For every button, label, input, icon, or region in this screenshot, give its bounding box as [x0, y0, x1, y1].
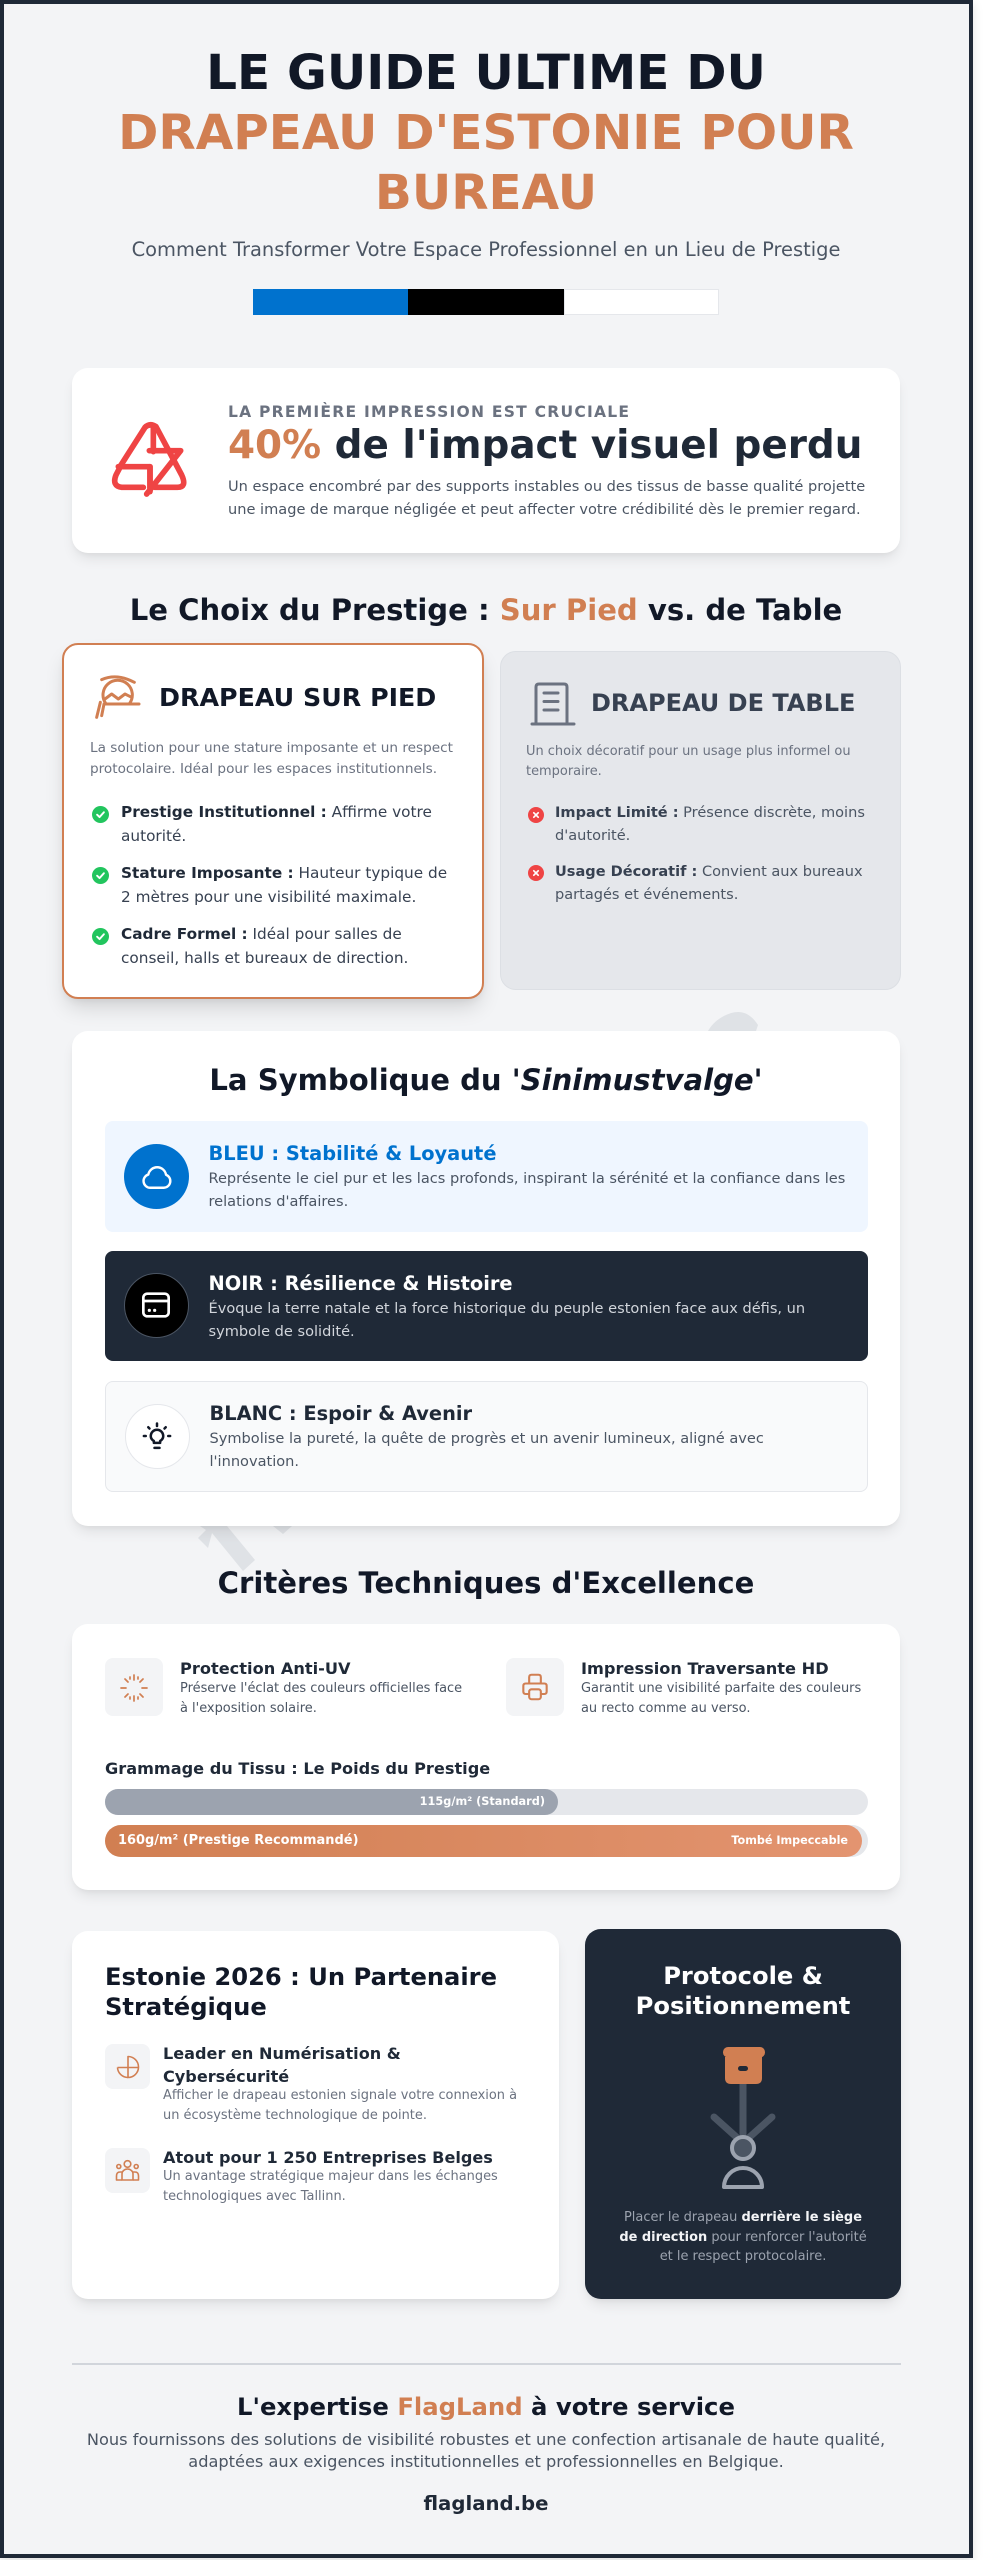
title [118, 44, 854, 220]
stat headline: 40% de l'impact visuel perdu [228, 423, 862, 468]
stand heading: DRAPEAU SUR PIED [159, 683, 436, 712]
list item: impact limite: Impact Limité : Présence discrète, moins [555, 804, 865, 821]
panel: drapeau de table [500, 651, 901, 990]
panel: first impression [72, 368, 900, 553]
list item: usage decoratif: Usage Décoratif : Convient aux bureaux [555, 863, 863, 880]
row: noir: Évoque la terre natale et la force historique du peuple estonien face aux défis, un [208, 1300, 805, 1317]
icon: check [92, 928, 109, 945]
partner heading: Stratégique [105, 1993, 267, 2021]
item: numerisation: Afficher le drapeau estonien signale votre connexion à [163, 2088, 517, 2103]
list item: stature: Stature Imposante : Hauteur typique de [121, 864, 447, 882]
item: entreprises belges: technologiques avec Tallinn. [163, 2189, 346, 2204]
bar chart: 160g prestige: Tombé Impeccable [731, 1834, 848, 1847]
symbolique heading: La Symbolique du 'Sinimustvalge' [209, 1063, 763, 1097]
feature: impression [506, 1658, 861, 1716]
panel: drapeau sur pied [62, 643, 484, 999]
row: blanc: l'innovation. [210, 1453, 299, 1470]
kicker: LA PREMIÈRE IMPRESSION EST CRUCIALE [228, 403, 630, 421]
description [228, 478, 865, 518]
icon: card [124, 1273, 189, 1338]
footer url: flagland.be [423, 2492, 549, 2515]
table description [526, 744, 851, 779]
item: numerisation: Cybersécurité [163, 2067, 289, 2086]
icon: bulb [125, 1404, 190, 1469]
estonian flag bar [253, 289, 719, 315]
table heading: DRAPEAU DE TABLE [591, 689, 855, 717]
list item: impact limite: d'autorité. [555, 827, 630, 844]
icon: warning triangle [112, 422, 186, 497]
icon: people [105, 2148, 150, 2193]
list item: usage decoratif [528, 863, 863, 903]
chart heading: Grammage du Tissu : Le Poids du Prestige [105, 1759, 490, 1778]
table description: temporaire. [526, 764, 602, 779]
row: noir [105, 1251, 868, 1361]
protocol text: de direction pour renforcer l'autorité [619, 2230, 867, 2244]
list item: prestige: autorité. [121, 827, 186, 845]
feature: anti-uv: à l'exposition solaire. [180, 1701, 317, 1716]
partner heading: Estonie 2026 : Un Partenaire [105, 1963, 497, 1991]
protocol heading: Protocole & [663, 1962, 823, 1990]
title: LE GUIDE ULTIME DU [206, 44, 766, 100]
heading: criteres: Critères Techniques d'Excellence [218, 1566, 754, 1600]
list item: stature [92, 864, 447, 906]
item: numerisation: un écosystème technologique de pointe. [163, 2108, 427, 2123]
subtitle: Comment Transformer Votre Espace Professionnel en un Lieu de Prestige [132, 238, 840, 261]
title: BUREAU [375, 164, 597, 220]
feature: impression: Garantit une visibilité parfaite des couleurs [581, 1681, 861, 1696]
list item: prestige: Prestige Institutionnel : Affirme votre [121, 803, 432, 821]
list item: prestige [92, 803, 432, 845]
bar chart: 160g prestige: 160g/m² (Prestige Recommandé) [118, 1833, 358, 1848]
description: Un espace encombré par des supports instables ou des tissus de basse qualité projette [228, 478, 865, 495]
footer heading: L'expertise FlagLand à votre service [237, 2392, 735, 2421]
footer description [87, 2430, 885, 2471]
row: blanc [105, 1381, 868, 1492]
icon: flag emblem [95, 675, 140, 719]
protocol heading [636, 1962, 850, 2020]
stand description [90, 740, 453, 777]
feature: anti-uv: Préserve l'éclat des couleurs officielles face [180, 1681, 462, 1696]
row: bleu: Représente le ciel pur et les lacs profonds, inspirant la sérénité et la confiance dans les [208, 1170, 845, 1187]
footer description: adaptées aux exigences institutionnelles et professionnelles en Belgique. [188, 2452, 784, 2471]
row: noir: symbole de solidité. [208, 1323, 355, 1340]
row: blanc: BLANC : Espoir & Avenir [210, 1402, 472, 1425]
panel: estonie 2026 [72, 1931, 559, 2299]
row: bleu: relations d'affaires. [208, 1193, 348, 1210]
description: une image de marque négligée et peut affecter votre crédibilité dès le premier regard. [228, 501, 861, 518]
list item: cadre formel: Cadre Formel : Idéal pour salles de [121, 925, 402, 943]
bar chart: 160g prestige [105, 1825, 868, 1857]
item: entreprises belges: Un avantage stratégique majeur dans les échanges [163, 2169, 498, 2184]
protocol text: et le respect protocolaire. [660, 2249, 826, 2264]
feature: anti-uv: Protection Anti-UV [180, 1659, 351, 1678]
icon: cross [528, 865, 544, 881]
partner heading [105, 1963, 497, 2021]
icon: sun rays [105, 1658, 163, 1716]
icon: cloud [124, 1144, 189, 1209]
protocol text: Placer le drapeau derrière le siège [624, 2210, 862, 2225]
panel: symbolique [72, 1031, 900, 1526]
row: noir: NOIR : Résilience & Histoire [208, 1272, 513, 1295]
feature: impression: au recto comme au verso. [581, 1701, 750, 1716]
list item: cadre formel: conseil, halls et bureaux de direction. [121, 949, 408, 967]
icon: cross [528, 807, 544, 823]
title: DRAPEAU D'ESTONIE POUR [118, 104, 854, 160]
list item: usage decoratif: partagés et événements. [555, 886, 738, 903]
icon: pie [105, 2044, 150, 2089]
icon: check [92, 806, 109, 823]
list item: cadre formel [92, 925, 408, 967]
row: blanc: Symbolise la pureté, la quête de progrès et un avenir lumineux, aligné avec [210, 1430, 764, 1447]
footer description: Nous fournissons des solutions de visibilité robustes et une confection artisanale de haute qualité, [87, 2430, 885, 2448]
feature: impression: Impression Traversante HD [581, 1659, 829, 1678]
diagram: flag behind chair [710, 2047, 776, 2189]
bar chart: 115g standard: 115g/m² (Standard) [420, 1795, 545, 1808]
row: bleu [105, 1121, 868, 1232]
bar chart: 115g standard [105, 1789, 868, 1815]
protocol heading: Positionnement [636, 1992, 850, 2020]
item: entreprises belges: Atout pour 1 250 Entreprises Belges [163, 2148, 493, 2167]
list item: impact limite [528, 804, 865, 844]
heading: comparison: Le Choix du Prestige : Sur Pied vs. de Table [130, 592, 842, 626]
stand description: La solution pour une stature imposante et un respect [90, 740, 453, 756]
icon: table flag [530, 682, 576, 726]
item: entreprises belges [105, 2148, 498, 2204]
panel: criteres techniques [72, 1624, 900, 1890]
list item: stature: 2 mètres pour une visibilité maximale. [121, 888, 416, 906]
feature: anti-uv [105, 1658, 462, 1716]
row: bleu: BLEU : Stabilité & Loyauté [208, 1142, 496, 1165]
icon: check [92, 867, 109, 884]
item: numerisation: Leader en Numérisation & [163, 2044, 401, 2063]
item: numerisation [105, 2044, 517, 2123]
table description: Un choix décoratif pour un usage plus informel ou [526, 744, 851, 759]
protocol text [619, 2210, 867, 2264]
stand description: protocolaire. Idéal pour les espaces institutionnels. [90, 761, 437, 777]
icon: printer [506, 1658, 564, 1716]
panel: protocole [585, 1929, 901, 2299]
